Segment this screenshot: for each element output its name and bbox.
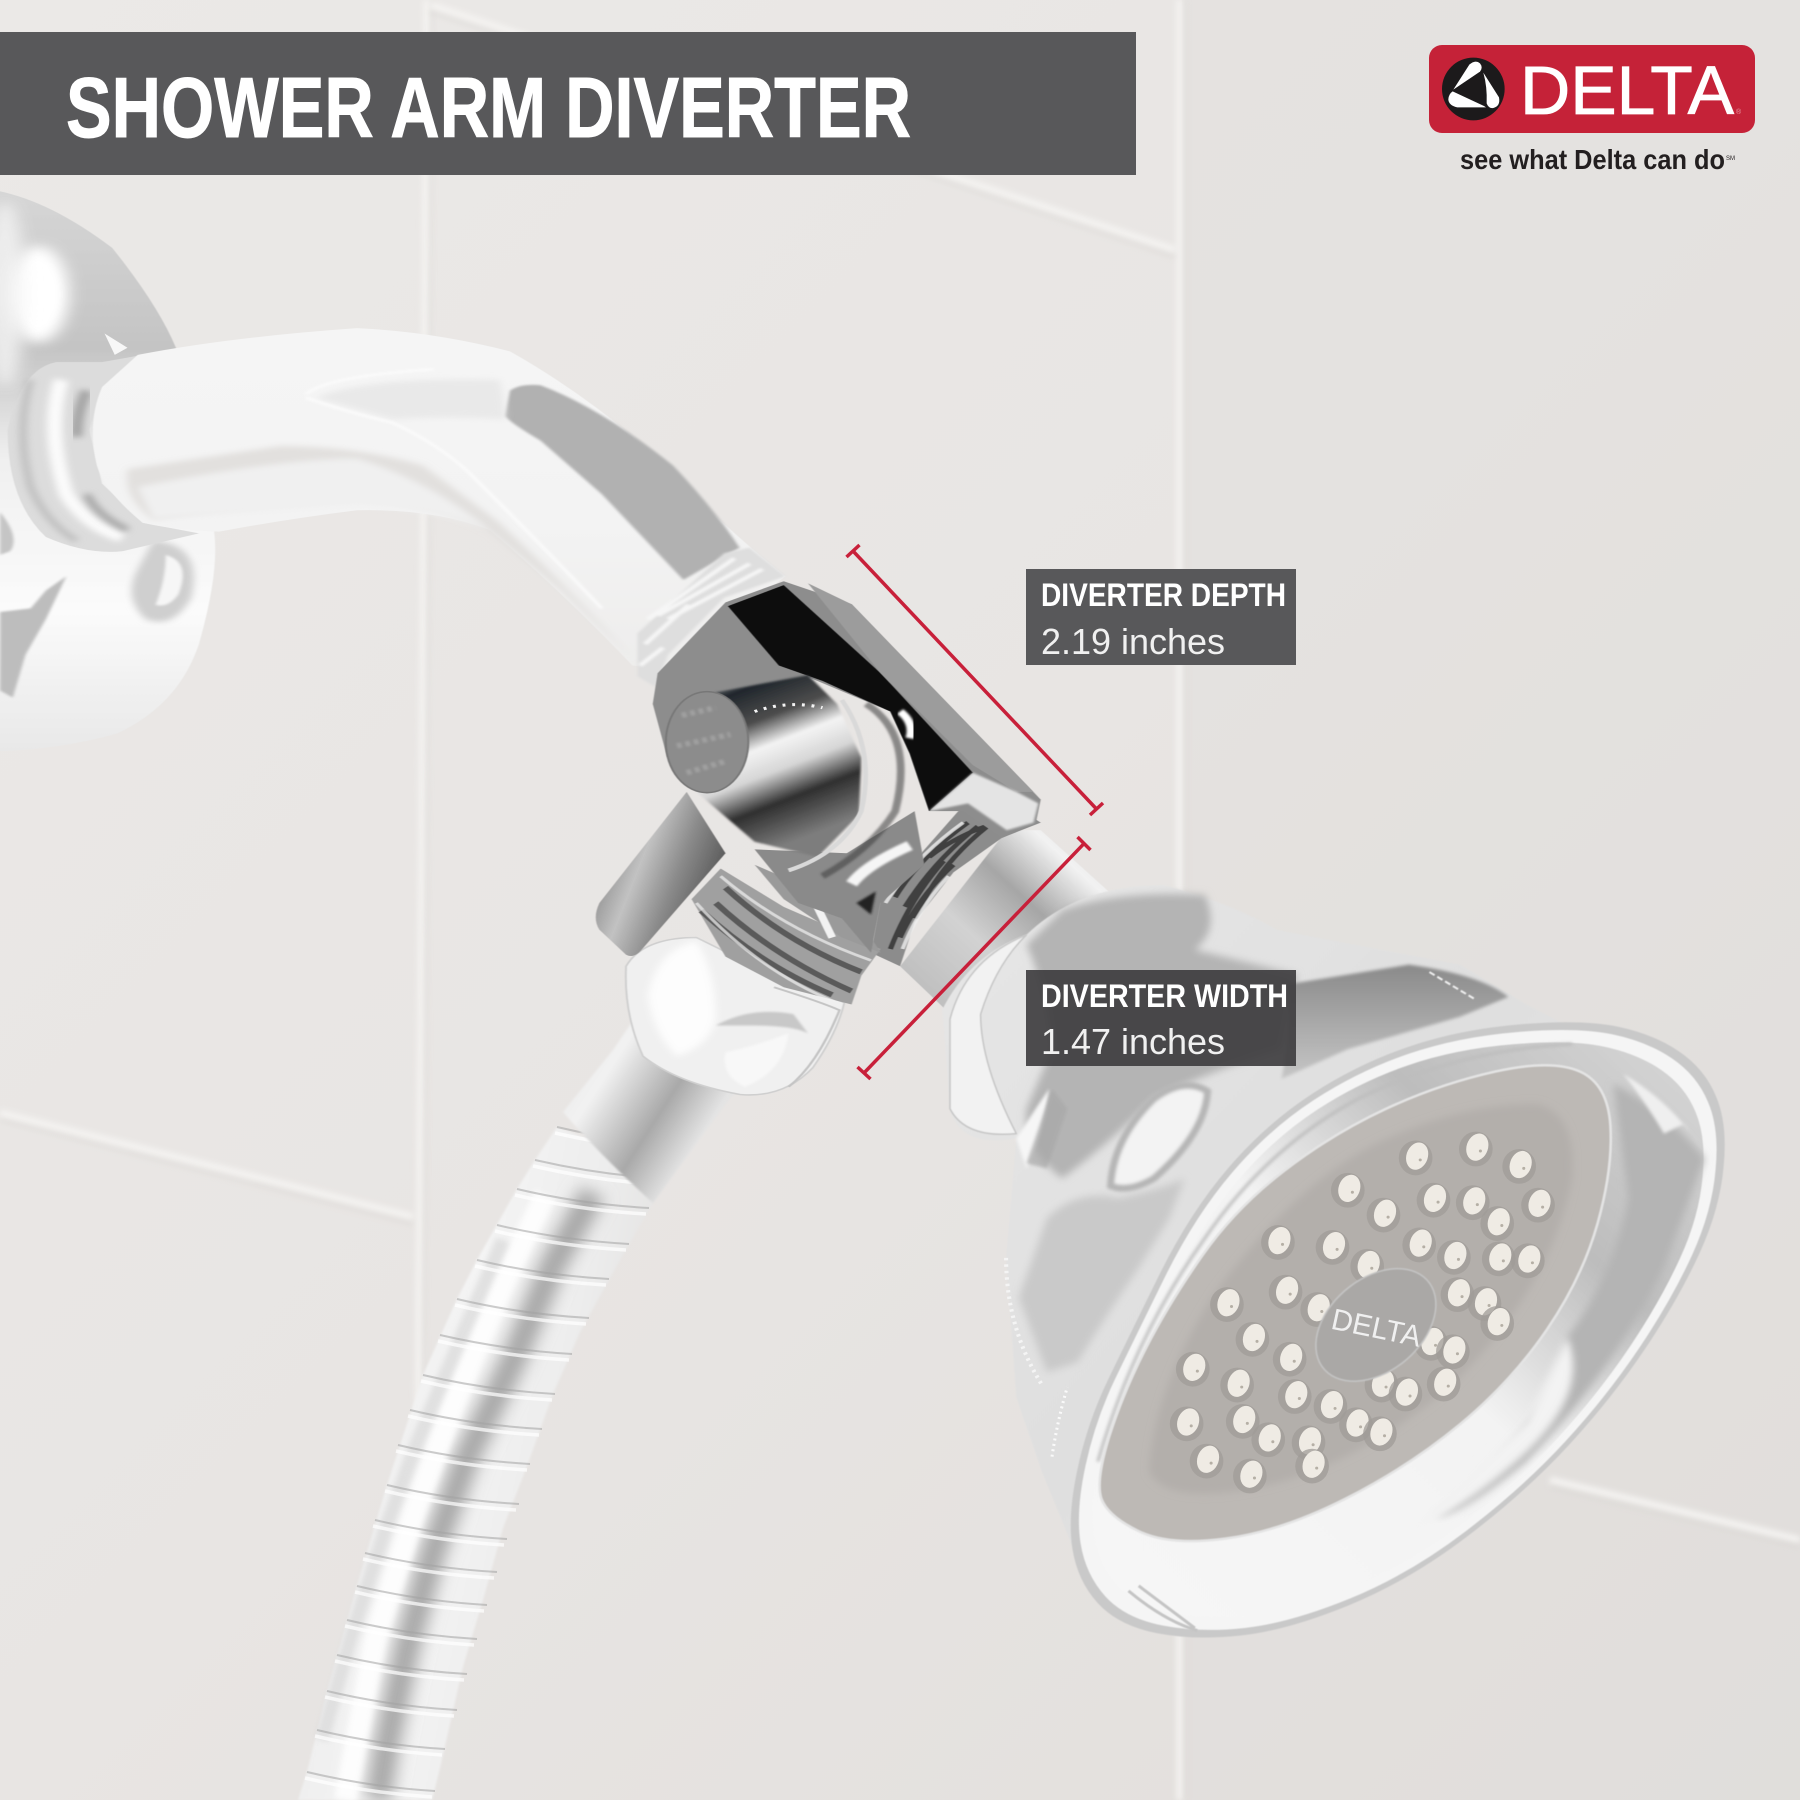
hose: [298, 1010, 770, 1800]
centre Delta badge: DELTA: [1328, 1303, 1425, 1354]
callout: diverter depth: DIVERTER DEPTH: [1041, 577, 1286, 613]
callout: diverter depth: [1026, 569, 1296, 665]
pipe between diverter and shower head: [900, 830, 1109, 1022]
hose ribs: [307, 1127, 689, 1791]
shower head: [942, 885, 1725, 1638]
diverter valve: [596, 581, 1041, 1004]
main body: [653, 581, 1041, 838]
shower arm: [8, 328, 785, 687]
lower threaded outlet: [692, 865, 881, 1004]
cup right-side reflection: [1434, 1084, 1705, 1516]
rim white band: [1079, 1030, 1717, 1630]
swivel ball: [626, 937, 844, 1095]
arm body: [93, 328, 785, 669]
centre chrome block: [755, 811, 924, 953]
lower arm shading: [127, 446, 632, 658]
spray nozzles: [1170, 1131, 1555, 1493]
callout: diverter depth: 2.19 inches: [1041, 621, 1225, 662]
Delta logo: ®: [1736, 108, 1742, 116]
dimension line: diverter depth: [846, 545, 1103, 815]
grey right facet: [808, 583, 1041, 800]
rim inner cup: [1092, 1042, 1704, 1618]
grey lower bell: [1019, 1178, 1185, 1372]
rim outer: [1071, 1022, 1725, 1638]
centre Delta badge: [1293, 1246, 1458, 1404]
chrome lower-right corner: [929, 773, 1038, 830]
lever handle: [596, 792, 726, 956]
dark top reflection: [1282, 965, 1508, 1079]
Delta logo: see what Delta can do: [1460, 144, 1725, 175]
dimension line: diverter width: [858, 837, 1090, 1079]
collar pale region: [950, 935, 1026, 1134]
selector knob: [666, 675, 901, 876]
callout: diverter width: DIVERTER WIDTH: [1041, 978, 1288, 1014]
title banner: SHOWER ARM DIVERTER: [66, 61, 911, 156]
black facet: [728, 585, 973, 811]
callout: diverter width: [1026, 970, 1296, 1066]
Delta logo: [1429, 45, 1755, 175]
callout: diverter width: 1.47 inches: [1041, 1021, 1225, 1062]
threaded end: [638, 548, 785, 687]
icon: Delta triangle mark: [1442, 58, 1505, 120]
Delta logo: DELTA: [1520, 52, 1734, 129]
top-left rim chrome line: [1098, 1044, 1572, 1462]
grey reflection on arm: [505, 385, 740, 580]
wall flange: [0, 191, 215, 751]
white oval: [1111, 1085, 1208, 1188]
spray face plate: [1100, 1065, 1611, 1541]
right threaded outlet: [871, 802, 1041, 966]
hose connector: [563, 1010, 770, 1203]
title banner: [0, 32, 1136, 175]
arm collar: [8, 355, 199, 552]
Delta logo: SM: [1726, 156, 1735, 162]
bell body: [942, 885, 1613, 1606]
